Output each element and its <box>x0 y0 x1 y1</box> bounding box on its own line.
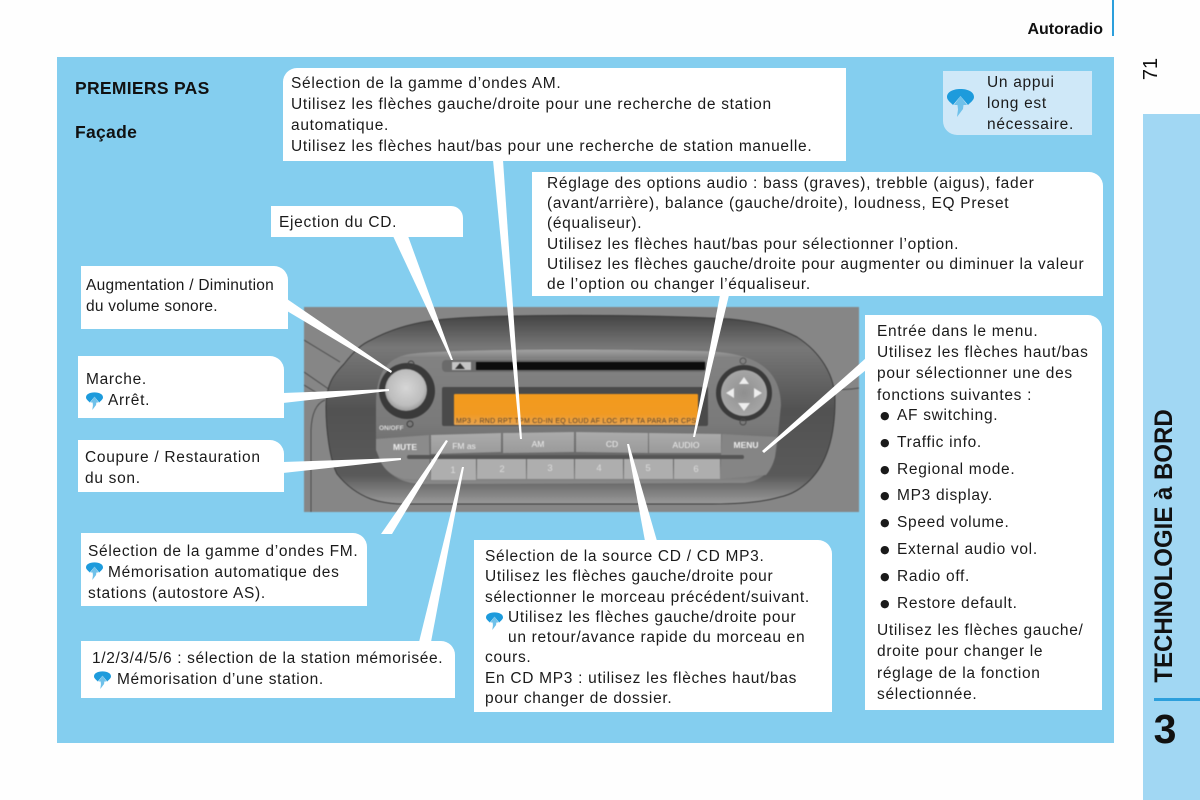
callout: menu: droite pour changer le <box>877 643 1043 660</box>
callout: CD: sélectionner le morceau précédent/suivant. <box>485 589 810 606</box>
function buttons: AM <box>532 439 544 449</box>
callout: audio: Utilisez les flèches gauche/droite pour augmenter ou diminuer la valeur <box>547 256 1084 273</box>
callout: volume: du volume sonore. <box>86 298 218 315</box>
menu function list: Traffic info. <box>897 434 982 451</box>
chapter accent line <box>1154 698 1200 701</box>
function buttons <box>376 432 777 480</box>
function buttons: FM as <box>452 441 476 451</box>
cd slot <box>442 360 706 372</box>
chapter number: 3 <box>1154 706 1176 752</box>
callout: presets: 1/2/3/4/5/6 : sélection de la station mémorisée. <box>92 650 443 667</box>
radio photo: ON/OFF <box>379 425 404 432</box>
callout: menu: sélectionnée. <box>877 686 977 703</box>
callout: menu: fonctions suivantes : <box>877 387 1032 404</box>
function buttons: AUDIO <box>673 440 700 450</box>
callout: volume <box>81 266 288 329</box>
preset buttons: 3 <box>547 463 553 474</box>
header accent bar <box>1112 0 1114 36</box>
callout: menu <box>865 315 1102 710</box>
direction pad <box>716 365 772 421</box>
preset buttons: 5 <box>645 463 651 474</box>
heading: premiers pas: PREMIERS PAS <box>75 78 210 98</box>
heading: façade: Façade <box>75 122 137 142</box>
callout: FM <box>81 533 367 606</box>
note text: long est <box>987 95 1047 112</box>
panel: main blue background <box>57 57 1114 743</box>
callout: CD: Sélection de la source CD / CD MP3. <box>485 548 764 565</box>
callout: audio: de l’option ou changer l’équaliseur. <box>547 276 811 293</box>
preset buttons: 6 <box>693 464 699 475</box>
pointer: audio <box>693 295 729 437</box>
list bullets: ● <box>880 409 890 422</box>
callout: menu: réglage de la fonction <box>877 665 1041 682</box>
pointer: volume <box>287 299 392 373</box>
preset buttons: 4 <box>596 463 602 474</box>
icon: long press <box>86 392 103 410</box>
callout: audio: (équaliseur). <box>547 215 642 232</box>
callout: FM: Sélection de la gamme d’ondes FM. <box>88 543 358 560</box>
icon: long press <box>486 612 503 630</box>
callout: AM: automatique. <box>291 117 389 134</box>
callout: audio: Réglage des options audio : bass (graves), trebble (aigus), fader <box>547 175 1034 192</box>
callout: mute: du son. <box>85 470 141 487</box>
callout: AM: Utilisez les flèches gauche/droite pour une recherche de station <box>291 96 772 113</box>
menu function list <box>897 407 1038 612</box>
callout: AM: Utilisez les flèches haut/bas pour une recherche de station manuelle. <box>291 138 812 155</box>
chapter title: TECHNOLOGIE à BORD <box>1150 409 1178 683</box>
callout: eject <box>271 206 463 237</box>
preset buttons: 2 <box>499 464 505 475</box>
list bullets: ● <box>880 489 890 502</box>
pointer: AM <box>493 160 522 439</box>
pointer: CD <box>627 444 657 541</box>
function buttons: MENU <box>733 440 759 450</box>
callout: CD: Utilisez les flèches gauche/droite pour <box>485 568 773 585</box>
note text: nécessaire. <box>987 116 1074 133</box>
callout: menu: Utilisez les flèches haut/bas <box>877 344 1089 361</box>
pointer: mute <box>283 458 401 473</box>
callout: CD <box>474 540 832 712</box>
page number: 71 <box>1140 58 1162 80</box>
radio photo <box>303 306 860 513</box>
pointer: menu <box>762 358 866 453</box>
menu function list: Regional mode. <box>897 461 1015 478</box>
callout: CD: Utilisez les flèches gauche/droite pour <box>508 609 796 626</box>
function buttons: CD <box>606 439 618 449</box>
pointer: power <box>283 389 389 403</box>
sidebar: chapter tab <box>1143 114 1200 800</box>
list bullets: ● <box>880 516 890 529</box>
list bullets: ● <box>880 543 890 556</box>
callout: presets <box>81 641 455 698</box>
callout: CD: pour changer de dossier. <box>485 690 672 707</box>
note text <box>987 74 1074 133</box>
pointer: presets <box>419 467 464 642</box>
menu function list: Radio off. <box>897 568 970 585</box>
callout: mute: Coupure / Restauration <box>85 449 261 466</box>
menu function list: Restore default. <box>897 595 1018 612</box>
callout: volume: Augmentation / Diminution <box>86 277 274 294</box>
callout: power <box>78 356 284 418</box>
preset buttons <box>431 458 720 480</box>
preset buttons: 1 <box>450 465 456 476</box>
icon: long press <box>86 562 103 580</box>
pointer: eject <box>393 236 453 360</box>
callout: audio: (avant/arrière), balance (gauche/droite), loudness, EQ Preset <box>547 195 1009 212</box>
note text: Un appui <box>987 74 1055 91</box>
list bullets <box>880 409 890 610</box>
list bullets: ● <box>880 570 890 583</box>
callout: FM: Mémorisation automatique des <box>108 564 340 581</box>
display <box>442 387 708 426</box>
callout: menu: Entrée dans le menu. <box>877 323 1038 340</box>
callout: FM: stations (autostore AS). <box>88 585 266 602</box>
menu function list: External audio vol. <box>897 541 1038 558</box>
callout: audio: Utilisez les flèches haut/bas pour sélectionner l’option. <box>547 236 959 253</box>
callout: power: Marche. <box>86 371 147 388</box>
header label: Autoradio <box>1027 21 1103 38</box>
callout: CD: cours. <box>485 649 531 666</box>
menu function list: Speed volume. <box>897 514 1010 531</box>
callout: eject: Ejection du CD. <box>279 214 397 231</box>
icon: long press <box>947 89 974 117</box>
callout: menu: pour sélectionner une des <box>877 365 1073 382</box>
menu function list: MP3 display. <box>897 487 993 504</box>
list bullets: ● <box>880 463 890 476</box>
callout: presets: Mémorisation d’une station. <box>117 671 324 688</box>
callout: note long press <box>943 71 1092 135</box>
pointer: FM <box>381 440 448 534</box>
callout: mute <box>78 440 284 492</box>
function buttons: MUTE <box>393 442 417 452</box>
callout: AM <box>283 68 846 161</box>
callout: CD: En CD MP3 : utilisez les flèches haut/bas <box>485 670 797 687</box>
menu function list: AF switching. <box>897 407 998 424</box>
callout: audio <box>532 172 1103 296</box>
callout: CD: un retour/avance rapide du morceau en <box>508 629 805 646</box>
callout: AM: Sélection de la gamme d’ondes AM. <box>291 75 561 92</box>
list bullets: ● <box>880 436 890 449</box>
icon: long press <box>94 671 111 689</box>
volume knob <box>379 363 435 419</box>
callout: power: Arrêt. <box>108 392 150 409</box>
display: MP3 ♪ RND RPT TPM CD-IN EQ LOUD AF LOC PTY TA PARA PR CPS <box>456 418 696 425</box>
callout: menu: Utilisez les flèches gauche/ <box>877 622 1084 639</box>
list bullets: ● <box>880 597 890 610</box>
